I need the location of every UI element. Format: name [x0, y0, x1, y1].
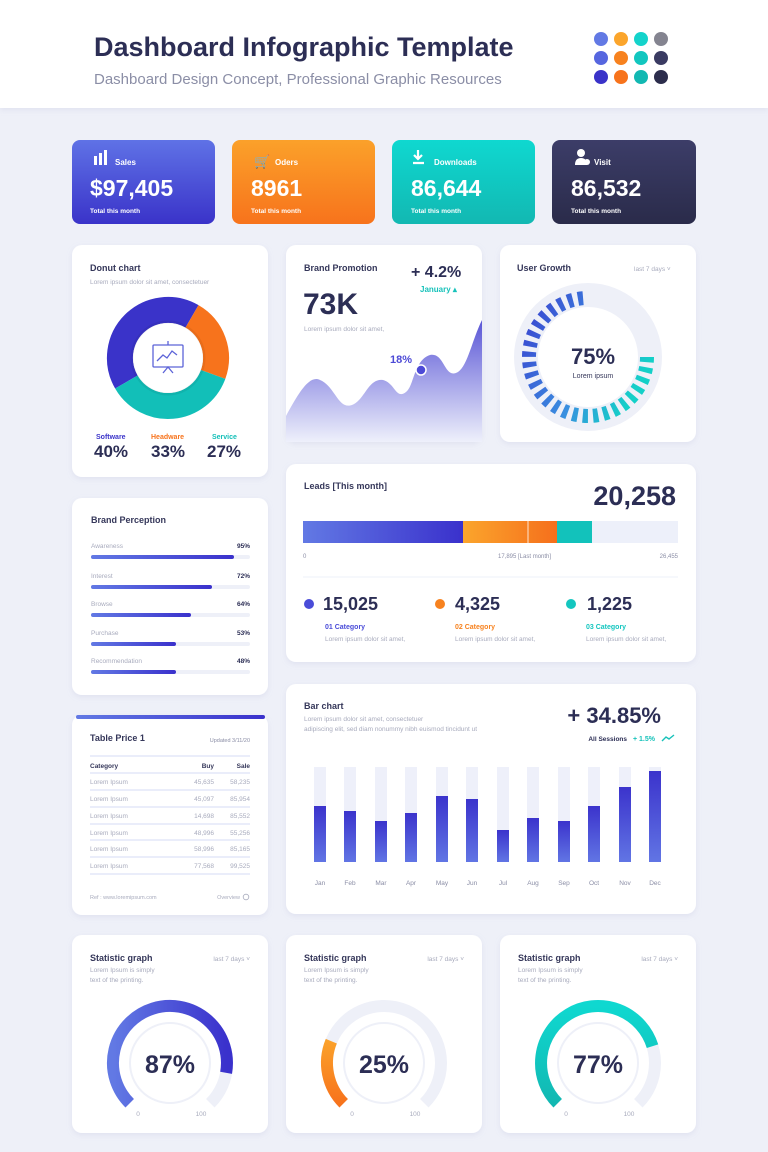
kpi card: orders: 8961	[251, 175, 302, 201]
panel: leads: 17,895 [Last month]	[498, 554, 551, 560]
kpi card: sales	[72, 140, 215, 224]
panel: brand perception: Interest	[91, 573, 113, 580]
bars: Mar	[375, 880, 387, 887]
panel: brand promotion	[286, 245, 482, 442]
panel: bar chart: Bar chart	[304, 701, 344, 711]
panel: bar chart: + 34.85%	[567, 703, 661, 728]
panel: statistic graph 1: Lorem Ipsum is simply	[90, 967, 155, 974]
panel: statistic graph 3: 100	[624, 1111, 635, 1118]
bars: Sep	[558, 880, 570, 887]
bars: May	[436, 880, 449, 887]
panel: bar chart: Lorem ipsum dolor sit amet, consectetuer	[304, 716, 424, 723]
panel: leads: 20,258	[593, 481, 676, 511]
panel: user growth: User Growth	[517, 263, 571, 273]
panel: table price: 99,525	[230, 863, 250, 870]
panel: table price: Lorem Ipsum	[90, 813, 128, 820]
kpi card: downloads: Total this month	[411, 208, 461, 215]
panel: table price: 58,235	[230, 779, 250, 786]
kpi card: sales: $97,405	[90, 175, 173, 201]
panel: brand perception: 48%	[237, 658, 250, 665]
panel: statistic graph 2: 25%	[359, 1051, 409, 1079]
header	[0, 0, 768, 108]
gauge 87%	[113, 1006, 227, 1103]
kpi card: orders: Total this month	[251, 208, 301, 215]
panel: statistic graph 2: last 7 days ˅	[427, 956, 464, 963]
panel: statistic graph 2: Statistic graph	[304, 953, 367, 963]
panel: brand perception: Awareness	[91, 543, 124, 550]
panel: donut chart: 33%	[151, 442, 185, 461]
panel: statistic graph 1: text of the printing.	[90, 977, 144, 984]
subtitle: Dashboard Design Concept, Professional Graphic Resources	[94, 71, 502, 88]
panel: brand perception: 72%	[237, 573, 250, 580]
bars: Jun	[467, 880, 478, 887]
bars: Jan	[315, 880, 326, 887]
panel: donut chart	[72, 245, 268, 477]
panel: user growth: last 7 days ˅	[634, 266, 671, 273]
panel: table price: Lorem Ipsum	[90, 779, 128, 786]
kpi card: downloads: 86,644	[411, 175, 482, 201]
panel: table price: 55,256	[230, 830, 250, 837]
panel: donut chart: 40%	[94, 442, 128, 461]
bars: Dec	[649, 880, 662, 887]
panel: table price: Lorem Ipsum	[90, 846, 128, 853]
panel: brand promotion: January ▴	[420, 285, 458, 294]
category 2	[435, 594, 535, 643]
panel: statistic graph 3: Lorem Ipsum is simply	[518, 967, 583, 974]
panel: brand perception: 95%	[237, 543, 250, 550]
panel: table price: Lorem Ipsum	[90, 863, 128, 870]
panel: brand perception: Purchase	[91, 630, 119, 637]
panel: table price: Ref : www.loremipsum.com	[90, 895, 157, 901]
panel: table price: 85,954	[230, 796, 250, 803]
panel: statistic graph 1	[72, 935, 268, 1133]
panel: bar chart: + 1.5%	[633, 736, 656, 743]
panel: table price: Sale	[237, 763, 250, 770]
bars: Aug	[527, 880, 539, 887]
panel: brand promotion: Lorem ipsum dolor sit amet,	[304, 326, 384, 333]
panel: leads: 26,455	[660, 554, 679, 560]
bars: Jul	[499, 880, 508, 887]
category 2: 02 Category	[455, 624, 495, 631]
panel: statistic graph 3	[500, 935, 696, 1133]
gauge 25%	[327, 1006, 441, 1103]
panel: table price: 45,635	[194, 779, 214, 786]
panel: statistic graph 1: 87%	[145, 1051, 195, 1079]
panel: statistic graph 2: 100	[410, 1111, 421, 1118]
category 3: 03 Category	[586, 624, 626, 631]
panel: bar chart	[286, 684, 696, 914]
panel: table price: 48,996	[194, 830, 214, 837]
panel: donut chart: Lorem ipsum dolor sit amet, consectetuer	[90, 279, 210, 286]
panel: statistic graph 3: 0	[564, 1111, 568, 1118]
bars: Nov	[619, 880, 632, 887]
panel: table price: Lorem Ipsum	[90, 830, 128, 837]
category 3: 1,225	[587, 594, 632, 614]
gauge 77%	[541, 1006, 655, 1103]
kpi card: orders: 🛒	[254, 154, 270, 169]
area chart	[286, 320, 482, 442]
kpi card: orders: Oders	[275, 158, 299, 167]
panel: statistic graph 3: last 7 days ˅	[641, 956, 678, 963]
kpi card: visit: Visit	[594, 158, 611, 167]
panel: table price	[72, 715, 268, 915]
panel: statistic graph 1: 100	[196, 1111, 207, 1118]
panel: donut chart: Donut chart	[90, 263, 141, 273]
kpi card: downloads: Downloads	[434, 158, 477, 167]
category 2: 4,325	[455, 594, 500, 614]
panel: table price: 85,552	[230, 813, 250, 820]
panel: donut chart: Software	[96, 434, 126, 441]
kpi card: orders	[232, 140, 375, 224]
panel: user growth: 75%	[571, 344, 615, 369]
panel: table price: Updated 3/11/20	[210, 738, 250, 744]
title: Dashboard Infographic Template	[94, 32, 514, 62]
panel: table price: Buy	[202, 763, 214, 770]
kpi card: visit: 86,532	[571, 175, 641, 201]
panel: donut chart: 27%	[207, 442, 241, 461]
kpi card: sales: Total this month	[90, 208, 140, 215]
ring gauge	[526, 295, 650, 419]
category 1: Lorem ipsum dolor sit amet,	[325, 636, 405, 643]
kpi card: visit	[552, 140, 696, 224]
icon: presentation board	[153, 341, 183, 373]
panel: table price: Table Price 1	[90, 733, 145, 743]
panel: brand promotion: + 4.2%	[411, 264, 461, 281]
category 3: Lorem ipsum dolor sit amet,	[586, 636, 666, 643]
panel: statistic graph 1: Statistic graph	[90, 953, 153, 963]
panel: table price: Category	[90, 763, 119, 770]
category 1	[304, 594, 405, 643]
panel: user growth: Lorem ipsum	[573, 373, 613, 380]
panel: brand perception: Brand Perception	[91, 515, 166, 525]
panel: brand promotion: 73K	[303, 288, 358, 321]
icon: color dots	[594, 32, 668, 84]
panel: statistic graph 3: text of the printing.	[518, 977, 572, 984]
panel: table price: 45,097	[194, 796, 214, 803]
panel: brand perception: Recommendation	[91, 658, 142, 665]
panel: statistic graph 2: text of the printing.	[304, 977, 358, 984]
panel: brand perception: 64%	[237, 601, 250, 608]
category 1: 01 Category	[325, 624, 365, 631]
panel: table price: 14,698	[194, 813, 214, 820]
panel: statistic graph 3: Statistic graph	[518, 953, 581, 963]
bars	[314, 767, 662, 887]
bars: Feb	[344, 880, 356, 887]
panel: leads: 0	[303, 554, 307, 560]
panel: table price: Overview	[217, 895, 240, 901]
panel: brand perception	[72, 498, 268, 695]
panel: statistic graph 2: 0	[350, 1111, 354, 1118]
panel: brand promotion: Brand Promotion	[304, 263, 378, 273]
panel: brand promotion: 18%	[390, 354, 412, 366]
panel: table price: 77,568	[194, 863, 214, 870]
panel: brand perception: Browse	[91, 601, 113, 608]
category 2: Lorem ipsum dolor sit amet,	[455, 636, 535, 643]
panel: table price: 58,996	[194, 846, 214, 853]
panel: brand perception: 53%	[237, 630, 250, 637]
panel: leads: Leads [This month]	[304, 481, 387, 491]
kpi card: downloads	[392, 140, 535, 224]
category 3	[566, 594, 666, 643]
panel: bar chart: adipiscing elit, sed diam nonummy nibh euismod tincidunt ut	[304, 726, 477, 733]
panel: statistic graph 2	[286, 935, 482, 1133]
panel: leads	[286, 464, 696, 662]
panel: bar chart: All Sessions	[588, 736, 627, 743]
kpi card: sales: Sales	[115, 158, 136, 167]
panel: statistic graph 1: last 7 days ˅	[213, 956, 250, 963]
kpi card: visit: Total this month	[571, 208, 621, 215]
panel: statistic graph 2: Lorem Ipsum is simply	[304, 967, 369, 974]
panel: table price: 85,165	[230, 846, 250, 853]
category 1: 15,025	[323, 594, 378, 614]
panel: user growth	[500, 245, 696, 442]
panel: statistic graph 1: 0	[136, 1111, 140, 1118]
bars: Oct	[589, 880, 599, 887]
panel: donut chart: Service	[212, 434, 237, 441]
stacked bar	[303, 521, 678, 543]
panel: donut chart: Headware	[151, 434, 184, 441]
panel: table price: Lorem Ipsum	[90, 796, 128, 803]
panel: statistic graph 3: 77%	[573, 1051, 623, 1079]
bars: Apr	[406, 880, 417, 887]
donut	[120, 310, 216, 406]
